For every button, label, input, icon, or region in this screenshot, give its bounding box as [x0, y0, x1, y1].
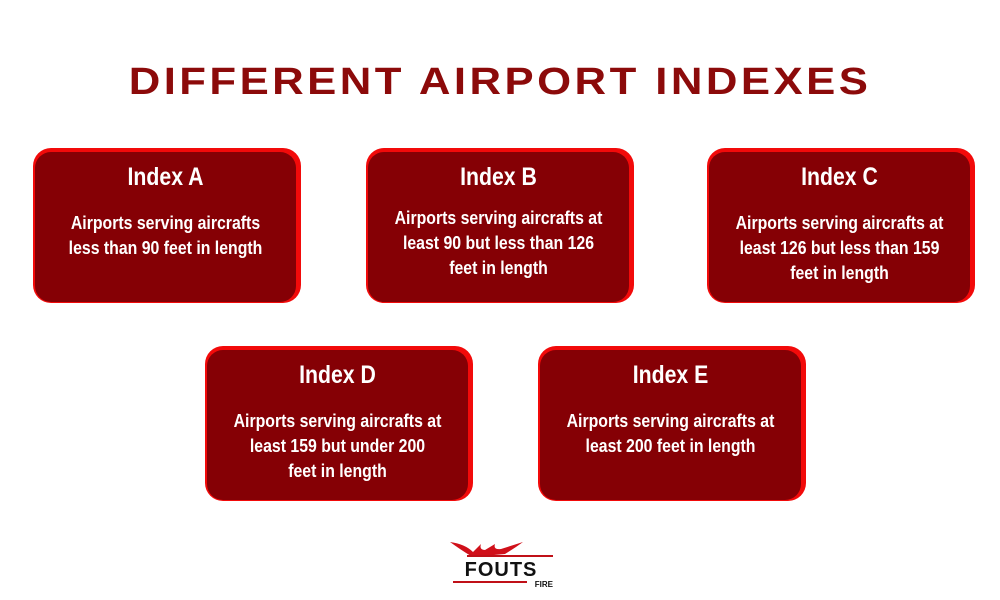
panel: Index E: least 200 feet in length: [586, 436, 755, 456]
panel: Index A: [33, 148, 301, 303]
panel: Index B: Airports serving aircrafts at: [395, 208, 602, 228]
panel: Index A: Index A: [128, 163, 203, 191]
panel: Index C: feet in length: [790, 263, 889, 283]
panel: Index D: Airports serving aircrafts at: [234, 411, 441, 431]
panel: Index C: [707, 148, 975, 303]
logo: Fouts Fire: FIRE: [535, 580, 554, 589]
panel: Index B: feet in length: [449, 258, 548, 278]
panel: Index A: less than 90 feet in length: [69, 238, 262, 258]
panel: Index B: Index B: [460, 163, 537, 191]
logo: Fouts Fire: FOUTS: [465, 559, 537, 581]
panel: Index B: [366, 148, 634, 303]
panel: Index D: least 159 but under 200: [250, 436, 425, 456]
panel: Index D: [205, 346, 473, 501]
panel: Index E: Airports serving aircrafts at: [567, 411, 774, 431]
logo: Fouts Fire: [450, 542, 554, 589]
title: DIFFERENT AIRPORT INDEXES: [129, 61, 871, 103]
panel: Index E: Index E: [633, 361, 708, 389]
panel: Index D: feet in length: [288, 461, 387, 481]
panel: Index C: least 126 but less than 159: [740, 238, 939, 258]
panel: Index C: Airports serving aircrafts at: [736, 213, 943, 233]
panel: Index A: Airports serving aircrafts: [71, 213, 260, 233]
panel: Index D: Index D: [299, 361, 376, 389]
panel: Index E: [538, 346, 806, 501]
panel: Index C: Index C: [801, 163, 878, 191]
panel: Index B: least 90 but less than 126: [403, 233, 594, 253]
